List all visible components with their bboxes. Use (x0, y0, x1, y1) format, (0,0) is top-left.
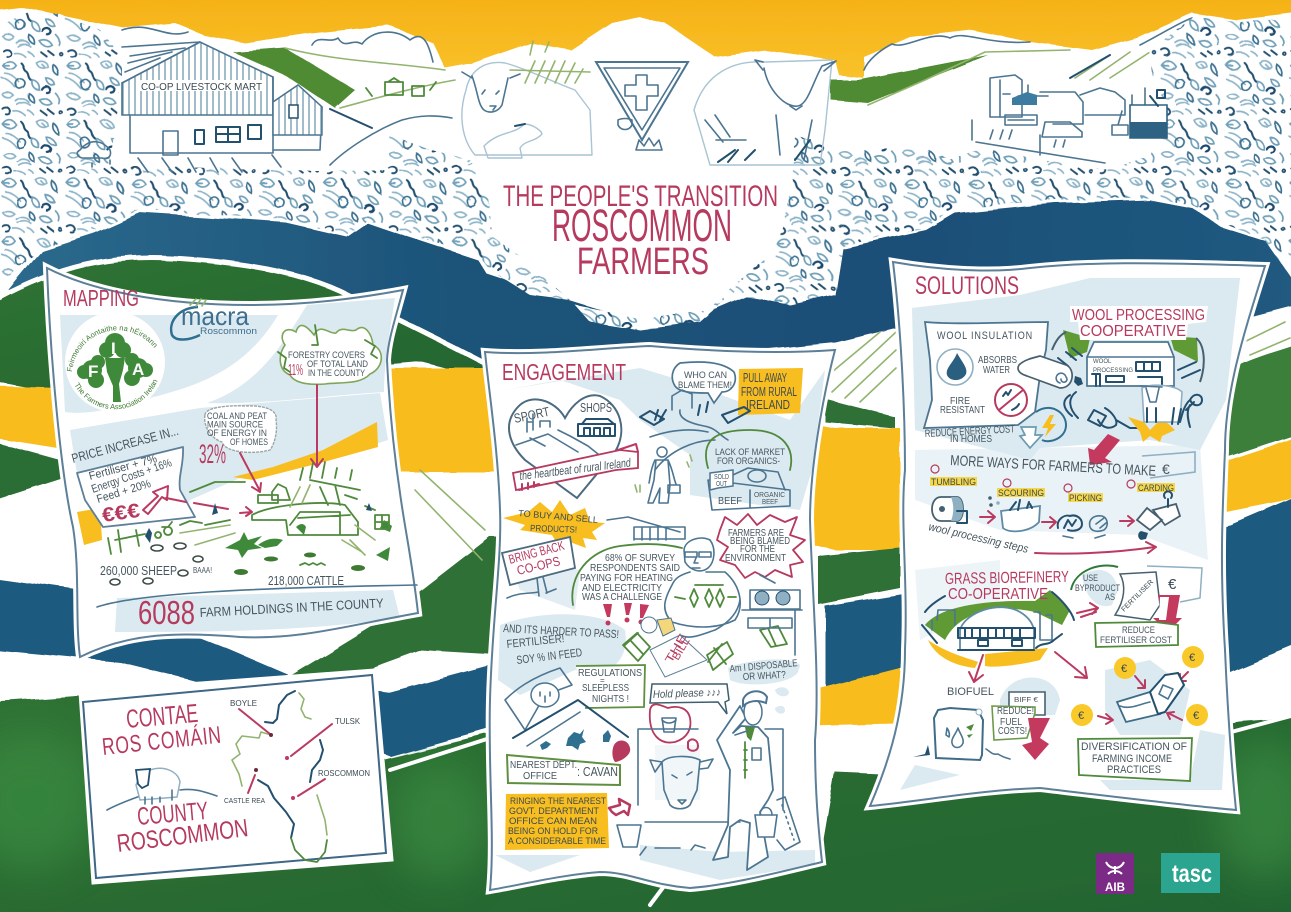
icon: energy down arrow and bolt (1020, 408, 1066, 448)
more ways heading: € (1162, 461, 1170, 477)
lack of market: BEEF (762, 497, 778, 506)
step 2 scouring: SCOURING (998, 488, 1044, 498)
factory (972, 75, 1167, 163)
reduce fertiliser cost box: FERTILISER COST (1100, 635, 1172, 646)
cattle count: 218,000 CATTLE (268, 573, 344, 588)
logo: AIB (1096, 853, 1134, 894)
farmer on phone (713, 687, 800, 870)
reduce fuel costs: FUEL (1000, 717, 1022, 728)
logo: tasc (1161, 853, 1220, 893)
lack of market: FOR ORGANICS- (717, 456, 780, 467)
wool insulation box: FIRE (950, 396, 970, 407)
crest (596, 62, 688, 150)
wool processing steps label: wool processing steps (927, 521, 1030, 556)
wool processing cooperative: PROCESSING (1093, 367, 1133, 374)
logo: IFA: Feirmeoirí Aontaithe na hÉireann (66, 326, 157, 372)
wool insulation box: IN HOMES (950, 433, 992, 445)
callout: pull away (738, 368, 803, 415)
coins and purse: € (1078, 710, 1084, 722)
arrows from biorefinery (969, 652, 1087, 682)
sleeping person in bed (505, 668, 628, 750)
title (503, 180, 778, 283)
price increase: PRICE INCREASE IN... (70, 423, 180, 466)
coal bubble: 32% (199, 439, 226, 469)
green strip under the yellow, left (0, 442, 70, 500)
coins and purse: € (1189, 652, 1195, 664)
reduce fuel costs: COSTS! (998, 726, 1027, 737)
yellow sky (0, 0, 1291, 78)
lack of market: OUT (716, 479, 727, 488)
wool insulation box: REDUCE ENERGY COST (925, 423, 1015, 440)
burst: buy and sell: PRODUCTS! (530, 523, 577, 535)
callout: ringing the department: GOVT. DEPARTMENT (509, 806, 599, 817)
speech: disposable: OR WHAT? (743, 670, 786, 683)
logo: IFA: A (132, 360, 144, 379)
map outline (232, 691, 327, 862)
use byproduct as fertiliser: BYPRODUCT (1075, 583, 1120, 594)
burst: farmers blamed: ENVIRONMENT (725, 553, 786, 564)
step 3 picking: PICKING (1069, 493, 1102, 503)
coal bubble: COAL AND PEAT (207, 411, 267, 422)
worried man with bill: THE (663, 632, 690, 666)
place labels (224, 698, 370, 805)
wool processing cooperative (1018, 306, 1208, 388)
worried man with bill (623, 538, 787, 677)
ribbon: the heartbeat of rural Ireland (519, 455, 632, 483)
person walking (635, 447, 692, 503)
title: FARMERS (577, 241, 709, 283)
logo: tasc: tasc (1172, 860, 1212, 888)
more ways heading: MORE WAYS FOR FARMERS TO MAKE (950, 453, 1157, 480)
logo: IFA: F (88, 362, 98, 381)
sign: bring back co-ops (502, 537, 575, 598)
title blob (492, 175, 790, 315)
speech: disposable (728, 658, 800, 683)
callout: ringing the department: RINGING THE NEAREST (510, 796, 606, 807)
wool insulation box (924, 322, 1048, 445)
logo: IFA (65, 315, 165, 410)
step 4 carding (1127, 480, 1180, 540)
place labels: ROSCOMMON (318, 768, 370, 778)
hard to pass text (503, 623, 619, 667)
place labels: CASTLE REA (224, 796, 265, 805)
place labels: TULSK (335, 716, 360, 726)
forestry bubble: 11% (288, 362, 303, 379)
heart: SHOPS (580, 400, 612, 415)
logo: macra (171, 299, 257, 340)
small yellow wedge (80, 505, 900, 726)
building: co-op livestock mart (77, 42, 452, 172)
speech: who can blame them: BLAME THEM! (678, 380, 732, 390)
hard to pass text: FERTILISER! (506, 633, 565, 651)
panel: county map: COUNTY (136, 797, 209, 831)
cow stall (638, 704, 783, 822)
regulations box: REGULATIONS (578, 667, 642, 679)
biofuel (913, 686, 1010, 760)
washes (495, 368, 825, 880)
logo: AIB: AIB (1105, 880, 1125, 894)
coal bubble (199, 406, 277, 469)
heart (509, 395, 621, 498)
distant hills (233, 48, 988, 108)
step 1 tumbling: TUMBLING (931, 477, 976, 487)
baaa label: BAAA! (193, 566, 212, 575)
forestry bubble (278, 325, 381, 384)
price increase: Feed + 20% (95, 478, 152, 506)
wool processing cooperative: WOOL PROCESSING (1072, 307, 1205, 324)
second river (0, 497, 1291, 756)
mapping heading: MAPPING (63, 285, 139, 311)
use byproduct as fertiliser: USE (1083, 573, 1098, 584)
pale grass (0, 730, 1291, 880)
callout: pull away: IRELAND (746, 397, 790, 412)
arrow: pink down (1088, 434, 1120, 465)
radio and stove (742, 575, 802, 655)
farm holdings: 6088 (138, 594, 195, 631)
use byproduct as fertiliser: € (1168, 576, 1177, 593)
coal bubble: OF ENERGY IN (207, 428, 267, 439)
lack of market: BEEF (718, 496, 742, 507)
title: ROSCOMMON (552, 200, 732, 251)
sign: bring back co-ops: CO-OPS (515, 553, 562, 578)
nearest office box: : CAVAN (577, 764, 618, 779)
price increase (70, 423, 252, 527)
farm holdings: FARM HOLDINGS IN THE COUNTY (199, 595, 384, 620)
burst: farmers blamed (717, 514, 805, 578)
hard to pass text: SOY % IN FEED (516, 647, 583, 667)
survey text: WAS A CHALLENGE (582, 591, 662, 603)
panel: engagement (485, 346, 835, 890)
clouds (122, 27, 433, 62)
place labels: BOYLE (230, 698, 257, 708)
wool insulation box: ABSORBS (978, 355, 1017, 366)
survey text: 68% OF SURVEY (605, 552, 675, 564)
lack of market: LACK OF MARKET (715, 447, 785, 458)
wool processing cooperative: COOPERATIVE (1080, 323, 1186, 340)
speech: hold please (650, 684, 729, 714)
cow (694, 60, 836, 165)
mart sign: CO-OP LIVESTOCK MART (141, 81, 263, 93)
arrow: pink outline (609, 799, 630, 815)
sheep count: 260,000 SHEEP (100, 563, 177, 578)
coins and purse (1071, 646, 1208, 726)
wool insulation box: RESISTANT (940, 405, 985, 416)
panel: solutions (870, 262, 1265, 810)
forestry bubble: OF TOTAL LAND (307, 359, 368, 370)
washes (60, 298, 400, 632)
burst: farmers blamed: BEING BLAMED (730, 536, 790, 547)
speech: hold please: Hold please ♪♪♪ (653, 687, 721, 701)
callout: ringing the department: BEING ON HOLD FOR (508, 826, 598, 837)
diversification box: FARMING INCOME (1092, 753, 1172, 765)
wool processing cooperative: WOOL (1093, 359, 1112, 365)
survey text: RESPONDENTS SAID (590, 562, 680, 574)
regulations box: NIGHTS ! (592, 693, 629, 705)
heart: SPORT (513, 404, 551, 426)
diversification box (1078, 738, 1192, 781)
logo: IFA: The Farmers Association Ireland (75, 380, 158, 410)
solutions heading: SOLUTIONS (915, 272, 1019, 300)
speech: who can blame them (672, 362, 735, 403)
diversification box: PRACTICES (1107, 764, 1161, 776)
coins and purse: € (1193, 710, 1199, 722)
reduce fuel costs: REDUCE! (997, 706, 1034, 717)
ribbon (513, 444, 638, 490)
grass biorefinery co-operative (922, 569, 1074, 668)
diversification box: DIVERSIFICATION OF (1081, 741, 1187, 753)
panel: mapping (42, 261, 422, 658)
burst: farmers blamed: FOR THE (740, 544, 775, 555)
grass biorefinery co-operative: GRASS BIOREFINERY (945, 569, 1069, 588)
pin (612, 740, 630, 762)
use byproduct as fertiliser (1071, 566, 1202, 632)
engagement heading: ENGAGEMENT (502, 359, 626, 385)
sign: bring back co-ops: BRING BACK (507, 538, 566, 567)
foliage border (0, 12, 1291, 330)
coal bubble: MAIN SOURCE (207, 420, 263, 430)
lack of market: ORGANIC (754, 490, 786, 499)
regulations box (576, 665, 645, 708)
icon: sheep on hill (107, 768, 217, 810)
survey text (572, 544, 682, 626)
logo: IFA: I (111, 339, 116, 358)
regulations box: SLEEPLESS (582, 682, 629, 694)
bottom fields (0, 695, 1291, 912)
title: THE PEOPLE'S TRANSITION (503, 180, 778, 213)
burst: buy and sell: TO BUY AND SELL (518, 508, 598, 525)
panel: county map: ROSCOMMON (115, 814, 250, 858)
worried man with bill: BILL (670, 636, 693, 662)
price increase: Energy Costs + 16% (90, 457, 173, 496)
burst: buy and sell (503, 500, 605, 548)
reduce fuel costs (992, 692, 1050, 760)
lack of market (706, 430, 791, 510)
forestry bubble: IN THE COUNTY (308, 368, 366, 379)
county names: CONTAE (125, 698, 199, 734)
reduce fertiliser cost box: REDUCE (1122, 625, 1155, 636)
farm holdings (97, 585, 417, 631)
use byproduct as fertiliser: AS (1105, 592, 1115, 603)
survey text: PAYING FOR HEATING (580, 572, 673, 584)
logo: macra: macra (181, 301, 249, 331)
wool insulation box: WOOL INSULATION (937, 330, 1033, 342)
callout: ringing the department (505, 793, 609, 850)
arrow: forestry to land (311, 385, 323, 467)
logo: macra: Roscommon (200, 326, 257, 337)
bucket and chick (617, 825, 705, 855)
speech: disposable: Am I DISPOSABLE (729, 658, 798, 675)
step 3 picking (1058, 484, 1134, 538)
wool yarn (1064, 392, 1140, 428)
survey text: AND ELECTRICITY (582, 582, 662, 594)
hard to pass text: AND ITS HARDER TO PASS! (503, 623, 619, 641)
panel: county map: ROS COMÁIN (101, 722, 223, 761)
nearest office box (507, 755, 620, 785)
callout: ringing the department: A CONSIDERABLE TIME (508, 836, 606, 847)
field stripes (415, 322, 1290, 560)
green strip middle left (288, 537, 505, 678)
yellow see-through wedges (233, 422, 378, 480)
yellow band (0, 368, 1291, 550)
wool processing steps label (927, 521, 1156, 556)
regulations box: = (600, 676, 605, 685)
step 2 scouring (988, 479, 1056, 531)
callout: pull away: PULL AWAY (743, 370, 787, 385)
coal bubble: OF HOMES (230, 437, 268, 448)
wool insulation box: WATER (983, 365, 1010, 376)
coins and purse: € (1121, 663, 1127, 675)
top river (0, 200, 1291, 370)
callout: pull away: FROM RURAL (741, 384, 797, 399)
green hill left (0, 257, 490, 396)
nearest office box: OFFICE (523, 770, 557, 782)
reduce fuel costs: BIFF € (1014, 695, 1039, 704)
lack of market: SOLD (714, 472, 729, 481)
panel: county map (80, 670, 392, 883)
landscape and farm (108, 462, 392, 585)
forestry bubble: FORESTRY COVERS (288, 350, 365, 361)
washes (900, 278, 1240, 790)
grass biorefinery co-operative: CO-OPERATIVE (948, 586, 1048, 603)
biofuel: BIOFUEL (947, 686, 994, 698)
reduce fertiliser cost box (1095, 622, 1178, 647)
step 4 carding: CARDING (1138, 483, 1174, 493)
arrow: coal to house (240, 453, 261, 492)
callout: ringing the department: OFFICE CAN MEAN (509, 816, 597, 827)
price increase: Fertiliser + 7% (88, 453, 158, 483)
road and farmland (640, 390, 750, 470)
step 1 tumbling (930, 465, 995, 523)
sheep on burst (1128, 385, 1202, 442)
burst: farmers blamed: FARMERS ARE (728, 528, 784, 539)
price increase: €€€ (101, 500, 141, 527)
nearest office box: NEAREST DEPT. (510, 759, 577, 771)
background building (607, 517, 685, 540)
use byproduct as fertiliser: FERTILISER (1120, 579, 1155, 613)
speech: who can blame them: WHO CAN (684, 370, 727, 380)
sheep and lamb (462, 41, 592, 158)
